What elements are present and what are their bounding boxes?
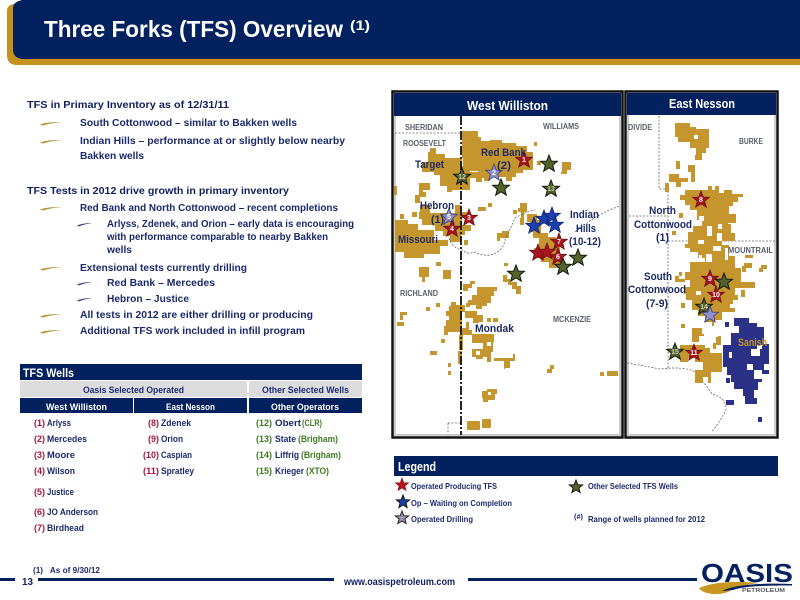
- heading: East Nesson: [627, 93, 776, 115]
- table: TFS wells: Moore: [47, 450, 75, 461]
- stars: East Nesson wells: 8: [699, 197, 703, 204]
- table: TFS wells: (13): [256, 434, 272, 445]
- county labels: [400, 122, 592, 324]
- table: TFS wells: Justice: [47, 487, 74, 498]
- title banner: Three Forks (TFS) Overview: [44, 16, 343, 42]
- panel: West Williston map: [392, 92, 622, 438]
- table: TFS wells: (10): [143, 450, 159, 461]
- text block: TFS tests in 2012: Extensional tests currently drilling: [80, 263, 247, 274]
- legend: Legend: [398, 459, 436, 474]
- table: TFS wells: Oasis Selected Operated: [83, 385, 184, 396]
- legend item: range of wells: Range of wells planned for 2012: [588, 514, 705, 524]
- title banner: [7, 0, 800, 65]
- heading: East Nesson: East Nesson: [669, 97, 735, 111]
- map labels: plays: (1): [431, 214, 444, 226]
- table: TFS wells: (8): [148, 418, 159, 429]
- text block: TFS tests in 2012: [27, 185, 354, 337]
- map labels: plays: North: [649, 205, 676, 217]
- county labels: MOUNTRAIL: [728, 246, 773, 255]
- stars: East Nesson wells: 9: [708, 276, 712, 283]
- county labels: RICHLAND: [400, 289, 438, 298]
- county labels: ROOSEVELT: [403, 139, 446, 148]
- stars: West Williston wells: 6: [556, 254, 560, 261]
- map labels: plays: (2): [497, 160, 511, 172]
- table: TFS wells: (11): [143, 466, 159, 477]
- map labels: plays: Red Bank: [481, 147, 527, 159]
- text block: TFS tests in 2012: All tests in 2012 are either drilling or producing: [80, 310, 313, 321]
- footnote: (1) As of 9/30/12: [33, 565, 100, 575]
- acreage: gold blocks: [394, 131, 618, 430]
- table: TFS wells: Obert: [275, 418, 302, 429]
- footer: [0, 576, 697, 588]
- acreage: Sanish blue blocks: [723, 318, 769, 422]
- text block: TFS tests in 2012: Hebron – Justice: [107, 294, 189, 305]
- table: TFS wells: State: [275, 434, 296, 445]
- state and county boundaries: [395, 116, 620, 435]
- legend: [394, 456, 778, 524]
- table: TFS wells: (15): [256, 466, 272, 477]
- stars: West Williston wells: 2: [492, 170, 496, 177]
- text block: TFS tests in 2012: TFS Tests in 2012 drive growth in primary inventory: [27, 185, 289, 197]
- table: TFS wells: Orion: [161, 434, 183, 445]
- table: TFS wells: (6): [34, 507, 45, 518]
- heading: West Williston: West Williston: [467, 99, 548, 113]
- legend item: range of wells: (#): [574, 512, 583, 521]
- table: TFS wells: (CLR): [302, 418, 322, 429]
- legend item: operated producing: [395, 478, 497, 491]
- map labels: plays: (10-12): [569, 236, 601, 248]
- table: TFS wells: (1): [34, 418, 45, 429]
- stars: West Williston wells: 5: [447, 214, 451, 221]
- table: TFS wells: (7): [34, 523, 45, 534]
- text block: TFS in primary inventory: South Cottonwood – similar to Bakken wells: [80, 118, 297, 129]
- map labels: plays: Cottonwood: [634, 219, 692, 231]
- text block: TFS in primary inventory: TFS in Primary Inventory as of 12/31/11: [27, 99, 229, 111]
- text block: TFS tests in 2012: Additional TFS work included in infill program: [80, 326, 305, 337]
- heading: West Williston: [394, 93, 621, 116]
- title banner: (1): [350, 17, 370, 33]
- table: TFS wells: West Williston: [46, 402, 107, 413]
- table: TFS wells: Other Selected Wells: [262, 385, 349, 396]
- text block: TFS tests in 2012: Red Bank – Mercedes: [107, 278, 215, 289]
- stars: East Nesson wells: [667, 191, 732, 360]
- table: TFS wells: (5): [34, 487, 45, 498]
- legend item: waiting on completion: [396, 495, 512, 508]
- text block: TFS in primary inventory: Bakken wells: [80, 151, 144, 162]
- logo: Oasis Petroleum: OASIS: [701, 558, 793, 588]
- stars: East Nesson wells: 10: [712, 292, 720, 299]
- map labels: plays: Missouri: [398, 234, 438, 246]
- stars: East Nesson wells: 11: [690, 350, 698, 357]
- text block: TFS in primary inventory: [27, 99, 345, 162]
- table: TFS wells: JO Anderson: [47, 507, 98, 518]
- table: TFS wells: (2): [34, 434, 45, 445]
- table: TFS wells: (12): [256, 418, 272, 429]
- county labels: BURKE: [739, 137, 764, 146]
- panel: East Nesson map: [626, 92, 778, 438]
- map labels: plays: Hills: [576, 223, 596, 235]
- text block: TFS tests in 2012: wells: [106, 245, 132, 256]
- county labels: [628, 123, 773, 255]
- white holes in main acreage: [694, 135, 728, 295]
- table: TFS wells: Mercedes: [47, 434, 87, 445]
- table: TFS wells: Spratley: [161, 466, 195, 477]
- stars: West Williston wells: 4: [450, 226, 454, 233]
- stars: East Nesson wells: 14: [700, 304, 708, 311]
- county labels: SHERIDAN: [405, 123, 443, 132]
- table: TFS wells: Other Operators: [271, 402, 339, 413]
- text block: TFS tests in 2012: Red Bank and North Cottonwood – recent completions: [80, 203, 338, 214]
- map labels: plays: (1): [656, 232, 669, 244]
- table: TFS wells: Zdenek: [161, 418, 192, 429]
- footer: www.oasispetroleum.com: [343, 576, 455, 588]
- legend item: other selected wells: [569, 480, 678, 492]
- table: TFS wells: (3): [34, 450, 45, 461]
- table: TFS wells: East Nesson: [166, 402, 215, 413]
- legend item: waiting on completion: Op – Waiting on Completion: [411, 498, 512, 508]
- county labels: DIVIDE: [628, 123, 653, 132]
- table: TFS wells: (9): [148, 434, 159, 445]
- table: TFS wells: (XTO): [306, 466, 329, 477]
- stars: West Williston wells: 3: [467, 215, 471, 222]
- stars: West Williston wells: 1: [522, 157, 526, 164]
- legend item: operated drilling: Operated Drilling: [411, 514, 473, 524]
- text block: TFS in primary inventory: Indian Hills – performance at or slightly below nearby: [80, 136, 345, 147]
- county labels: WILLIAMS: [543, 122, 580, 131]
- table: TFS wells: [20, 364, 362, 534]
- logo: Oasis Petroleum: PETROLEUM: [742, 588, 785, 594]
- legend item: operated producing: Operated Producing TFS: [411, 481, 497, 491]
- acreage: gold blocks: [665, 123, 767, 383]
- stars: West Williston wells: 13: [547, 186, 555, 193]
- table: TFS wells: Krieger: [275, 466, 304, 477]
- table: TFS wells: (Brigham): [298, 434, 338, 445]
- county boundaries: [627, 116, 775, 431]
- stars: West Williston wells: 12: [458, 174, 466, 181]
- text block: TFS tests in 2012: Arlyss, Zdenek, and Orion – early data is encouraging: [107, 219, 354, 230]
- map labels: plays: [628, 205, 767, 349]
- table: TFS wells: Wilson: [47, 466, 75, 477]
- map labels: plays: (7-9): [646, 298, 668, 310]
- table: TFS wells: Liffrig: [275, 450, 299, 461]
- table: TFS wells: (14): [256, 450, 272, 461]
- map labels: plays: South: [644, 271, 672, 283]
- table: TFS wells: (Brigham): [301, 450, 341, 461]
- stars: West Williston wells: 7: [557, 239, 561, 246]
- map labels: plays: Mondak: [475, 323, 515, 335]
- map labels: plays: Hebron: [420, 200, 454, 212]
- map labels: plays: Target: [415, 159, 444, 171]
- legend item: operated drilling: [395, 511, 473, 524]
- table: TFS wells: TFS Wells: [23, 366, 74, 380]
- table: TFS wells: (4): [34, 466, 45, 477]
- table: TFS wells: Caspian: [161, 450, 192, 461]
- stars: West Williston wells: [441, 151, 586, 281]
- table: TFS wells: Birdhead: [47, 523, 84, 534]
- county labels: MCKENZIE: [553, 315, 592, 324]
- map labels: plays: Cottonwood: [628, 284, 686, 296]
- stars: East Nesson wells: 15: [671, 349, 679, 356]
- map labels: plays: Indian: [570, 209, 599, 221]
- footer: 13: [22, 577, 33, 588]
- legend item: other selected wells: Other Selected TFS Wells: [588, 481, 678, 491]
- table: TFS wells: Arlyss: [47, 418, 71, 429]
- map labels: plays: [398, 147, 601, 335]
- map labels: plays: Sanish: [738, 337, 767, 349]
- text block: TFS tests in 2012: with performance comparable to nearby Bakken: [106, 232, 328, 243]
- legend item: range of wells: [574, 512, 705, 524]
